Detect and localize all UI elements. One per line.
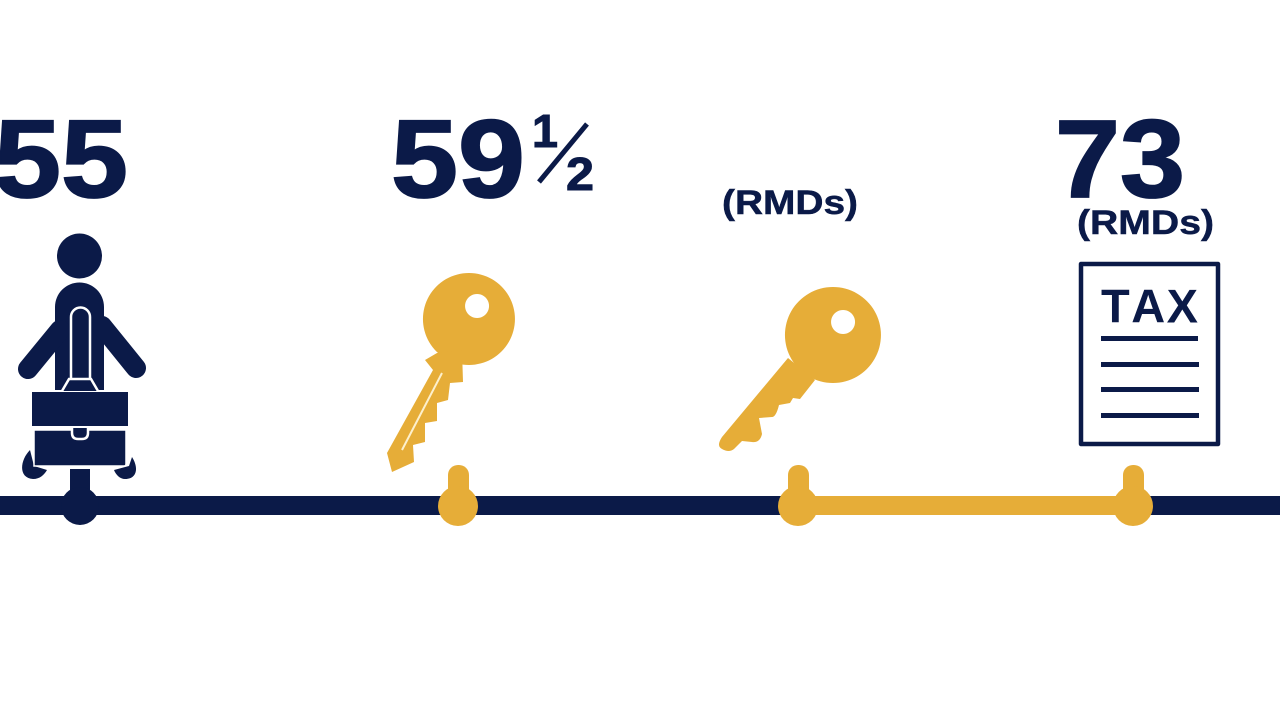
document heading: TAX <box>1101 280 1198 332</box>
highlighted timeline segment <box>798 496 1134 515</box>
age label: 59 and a half: 2 <box>566 148 594 200</box>
RMDs label middle: (RMDs) <box>722 184 858 222</box>
RMDs label right: (RMDs) <box>1077 204 1214 242</box>
marker: age 59 and a half <box>438 465 478 526</box>
document lines <box>1101 336 1199 418</box>
arms <box>28 326 136 369</box>
icon: key one <box>387 273 515 472</box>
age label: 59 and a half: 59 <box>391 98 525 221</box>
marker: age 73 <box>1113 465 1153 526</box>
icon: tax document <box>1081 264 1218 444</box>
briefcase handle <box>62 379 98 391</box>
icon: person with briefcase <box>22 234 136 479</box>
marker: RMD start <box>778 465 818 526</box>
marker: age 55 <box>61 469 99 525</box>
head <box>57 234 102 278</box>
backpack strap outline <box>71 308 90 380</box>
key highlight <box>402 373 442 450</box>
body <box>55 282 104 390</box>
timeline base line <box>0 496 1280 515</box>
feet <box>22 450 47 479</box>
icon: key two <box>719 287 881 451</box>
age label: 73: 73 <box>1055 98 1185 221</box>
age label: 59 and a half: 1 <box>532 105 558 157</box>
briefcase <box>32 392 128 426</box>
clasp <box>72 428 88 439</box>
age label: 59 and a half <box>391 98 594 221</box>
